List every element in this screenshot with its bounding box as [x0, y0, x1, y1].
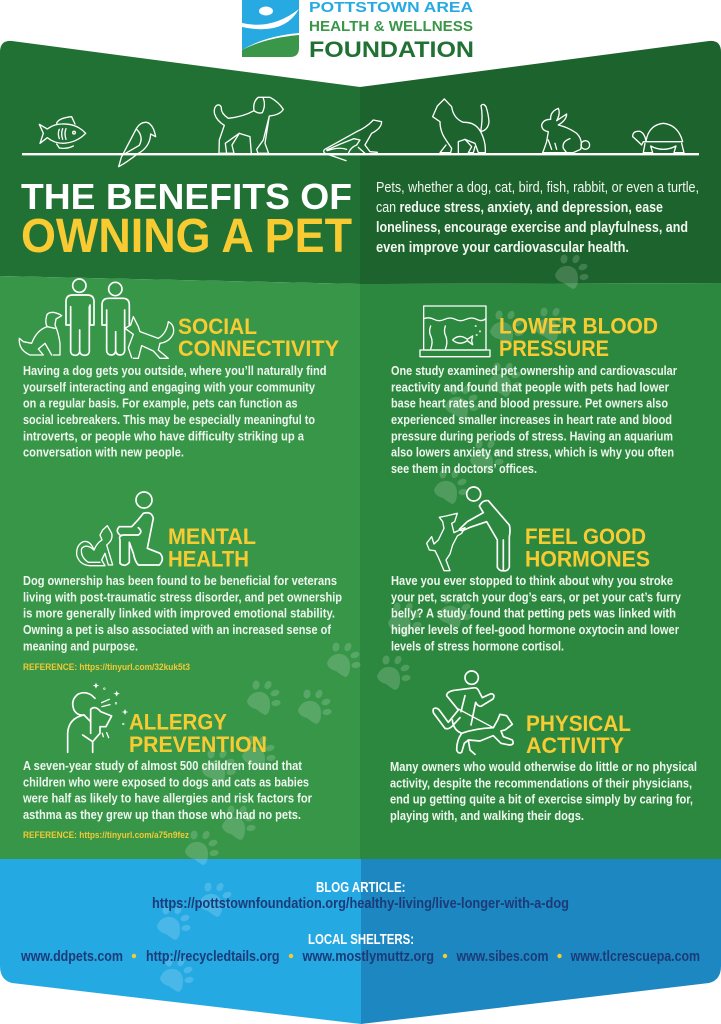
body text — [391, 573, 682, 653]
logo text: HEALTH & WELLNESS — [309, 18, 473, 35]
body text: belly? A study found that petting pets was linked with — [391, 606, 676, 621]
body text: A seven-year study of almost 500 children found that — [23, 758, 303, 773]
heading: ACTIVITY — [526, 733, 624, 758]
icon: person with jumping dog — [427, 487, 510, 571]
icon: parrot — [119, 122, 156, 167]
body text: playing with, and walking their dogs. — [390, 808, 584, 823]
heading — [178, 314, 339, 361]
body text — [23, 573, 342, 653]
body text: asthma as they grew up than those who had no pets. — [23, 807, 301, 822]
heading: SOCIAL — [178, 314, 257, 339]
local shelters: www.sibes.com — [456, 949, 548, 965]
blog article: BLOG ARTICLE: — [316, 880, 406, 896]
body text: meaning and purpose. — [23, 638, 138, 653]
body text — [22, 758, 312, 822]
icon: rabbit — [542, 108, 590, 153]
animal icons row — [39, 97, 684, 167]
icon: sneezing person — [68, 683, 128, 752]
body text: living with post-traumatic stress disorder, and pet ownership — [23, 589, 342, 604]
panel: allergy prevention — [22, 683, 312, 841]
body text: on a regular basis. For example, pets can function as — [23, 396, 298, 411]
intro text — [376, 180, 699, 256]
reference: REFERENCE: https://tinyurl.com/32kuk5t3 — [23, 662, 190, 673]
shelf line — [22, 153, 699, 155]
heading — [129, 710, 267, 757]
local shelters: www.mostlymuttz.org — [302, 949, 434, 965]
heading: FEEL GOOD — [525, 524, 646, 549]
logo text: FOUNDATION — [309, 37, 474, 62]
icon: turtle — [633, 123, 684, 153]
blog article: https://pottstownfoundation.org/healthy-living/live-longer-with-a-dog — [152, 896, 569, 912]
body text — [23, 363, 326, 460]
body text: see them in doctors’ offices. — [391, 461, 537, 476]
local shelters: www.tlcrescuepa.com — [570, 949, 700, 965]
title: THE BENEFITS OF — [21, 176, 352, 217]
body text: Have you ever stopped to think about why you stroke — [391, 573, 673, 588]
heading: HEALTH — [168, 546, 249, 572]
title: OWNING A PET — [21, 210, 352, 263]
local shelters: www.ddpets.com — [20, 949, 123, 965]
icon: iguana — [324, 120, 382, 161]
body text: Dog ownership has been found to be beneficial for veterans — [23, 573, 337, 588]
blog article — [152, 880, 569, 912]
heading: ALLERGY — [129, 710, 227, 734]
heading: MENTAL — [168, 524, 256, 549]
local shelters: LOCAL SHELTERS: — [308, 932, 414, 948]
footer — [20, 880, 700, 965]
logo mark — [242, 0, 299, 57]
body text: experienced smaller increases in heart rate and blood — [391, 412, 672, 427]
heading — [526, 711, 631, 758]
body text: social icebreakers. This may be especially meaningful to — [23, 412, 315, 427]
panel: mental health — [23, 492, 342, 673]
panel: lower blood pressure — [391, 306, 677, 476]
body text: base heart rates and blood pressure. Pet owners also — [391, 396, 668, 411]
heading: CONNECTIVITY — [178, 336, 339, 361]
icon: aquarium — [420, 306, 490, 357]
body text: yourself interacting and engaging with your community — [23, 379, 316, 394]
icon: people with dogs — [19, 279, 174, 358]
heading: HORMONES — [525, 546, 650, 572]
body text: Owning a pet is also associated with an increased sense of — [23, 622, 331, 637]
title — [21, 176, 352, 263]
reference: REFERENCE: https://tinyurl.com/a75n9fez — [23, 830, 189, 841]
heading: PRESSURE — [499, 336, 609, 361]
heading: PREVENTION — [129, 732, 267, 757]
body text: levels of stress hormone cortisol. — [391, 638, 564, 653]
body text — [390, 759, 697, 823]
body text: Having a dog gets you outside, where you’ll naturally find — [23, 363, 326, 378]
intro text: can reduce stress, anxiety, and depression, ease — [376, 200, 663, 216]
body text: introverts, or people who have difficulty striking up a — [23, 428, 305, 443]
panel: feel good hormones — [391, 487, 682, 653]
body text: conversation with new people. — [23, 445, 184, 460]
local shelters — [20, 932, 700, 965]
body text — [391, 363, 677, 476]
icon: person running with dog — [433, 671, 513, 754]
icon: cat — [433, 99, 489, 153]
heading: LOWER BLOOD — [499, 314, 658, 338]
panel: physical activity — [390, 671, 697, 823]
icon: person with cat — [77, 492, 162, 566]
icon: fish — [39, 117, 86, 148]
panel: social connectivity — [19, 279, 339, 460]
heading — [525, 524, 650, 572]
body text: were half as likely to have allergies and risk factors for — [22, 791, 312, 806]
intro text: even improve your cardiovascular health. — [376, 240, 629, 256]
local shelters: http://recycledtails.org — [146, 949, 280, 965]
heading — [499, 314, 658, 361]
decorative paw prints — [157, 254, 589, 992]
icon: dog — [214, 97, 283, 153]
heading — [168, 524, 256, 572]
heading: PHYSICAL — [526, 711, 631, 736]
logo text — [309, 0, 474, 62]
body text: is more generally linked with improved emotional stability. — [23, 606, 335, 621]
body text: reactivity and found that people with pets had lower — [391, 379, 669, 394]
body text: children who were exposed to dogs and cats as babies — [23, 774, 309, 789]
logo — [242, 0, 474, 62]
